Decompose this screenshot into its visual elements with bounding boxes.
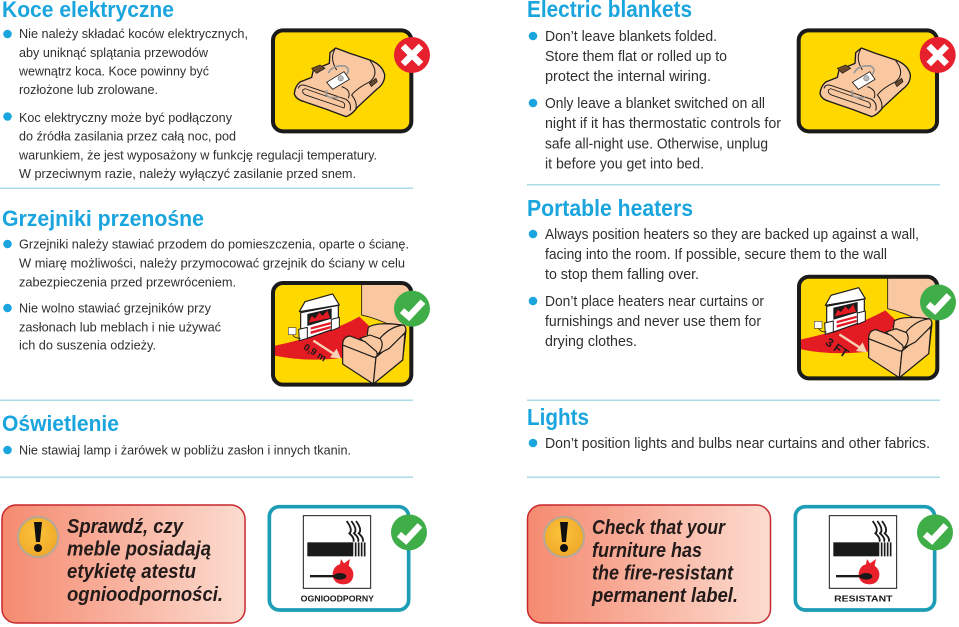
text block: blanket bullets: it before you get into bed.	[545, 156, 704, 172]
text block: lights bullet: Don’t position lights and bulbs near curtains and other fabrics.	[545, 435, 930, 452]
icon: heater and armchair, tick (PL): 0,9 m	[301, 342, 328, 364]
label card: fire-resistant sign (PL)	[269, 507, 427, 610]
text block: grzejniki bullets: Grzejniki należy stawiać przodem do pomieszczenia, oparte o ścianę.	[19, 236, 409, 252]
label card: fire-resistant sign (PL): OGNIOODPORNY	[301, 594, 374, 604]
icon: heater and armchair, tick (PL)	[273, 283, 430, 385]
text block: grzejniki bullets: zasłonach lub meblach i nie używać	[19, 320, 221, 334]
text block: grzejniki bullets: Nie wolno stawiać grzejników przy	[19, 300, 211, 316]
label card: fire-resistant sign (EN): RESISTANT	[834, 594, 893, 604]
divider	[527, 400, 940, 401]
callout: check furniture (EN)	[528, 505, 770, 623]
heading: Oświetlenie: Oświetlenie	[2, 411, 119, 436]
label card: fire-resistant sign (EN)	[795, 507, 953, 610]
callout: check furniture (EN): the fire-resistant	[592, 562, 734, 584]
icon: heater and armchair, tick (EN)	[799, 277, 956, 378]
text block: heater bullets	[529, 226, 919, 350]
text block: grzejniki bullets	[3, 236, 409, 352]
text block: blanket bullets: safe all-night use. Otherwise, unplug	[545, 136, 768, 152]
callout: check furniture (EN): permanent label.	[591, 585, 738, 607]
text block: koce bullets: rozłożone lub zrolowane.	[19, 82, 158, 97]
text block: blanket bullets: night if it has thermostatic controls for	[545, 115, 781, 132]
text block: blanket bullets: Only leave a blanket switched on all	[545, 95, 765, 112]
heading: Grzejniki przenośne: Grzejniki przenośne	[2, 206, 204, 231]
callout: check furniture (PL): Sprawdź, czy	[67, 516, 184, 538]
callout: check furniture (PL)	[2, 505, 245, 623]
text block: heater bullets: Don’t place heaters near curtains or	[545, 293, 764, 310]
text block: blanket bullets: Store them flat or rolled up to	[545, 48, 727, 65]
text block: koce bullets: do źródła zasilania przez całą noc, pod	[19, 128, 236, 144]
text block: koce bullets	[3, 26, 377, 181]
text block: koce bullets: Koc elektryczny może być podłączony	[19, 110, 232, 125]
text block: heater bullets: to stop them falling over.	[545, 266, 699, 283]
divider	[527, 476, 940, 478]
divider	[0, 476, 413, 478]
callout: check furniture (EN): furniture has	[592, 540, 702, 562]
text block: grzejniki bullets: ich do suszenia odzieży.	[19, 338, 156, 352]
text block: heater bullets: Always position heaters so they are backed up against a wall,	[545, 226, 919, 243]
text block: oświetlenie bullet: Nie stawiaj lamp i żarówek w pobliżu zasłon i innych tkanin.	[19, 442, 351, 458]
divider	[527, 184, 940, 186]
text block: heater bullets: furnishings and never use them for	[545, 313, 761, 330]
icon: folded blanket, crossed (EN)	[799, 30, 956, 131]
text block: grzejniki bullets: zabezpieczenia przed przewróceniem.	[19, 274, 236, 290]
callout: check furniture (PL): ognioodporności.	[67, 584, 223, 606]
callout: check furniture (PL): meble posiadają	[67, 538, 211, 560]
icon: warning	[544, 517, 584, 557]
text block: heater bullets: drying clothes.	[545, 333, 637, 350]
icon: warning	[18, 517, 58, 557]
divider	[0, 188, 413, 189]
text block: koce bullets: warunkiem, że jest wyposażony w funkcję regulacji temperatury.	[18, 148, 377, 162]
text block: grzejniki bullets: W miarę możliwości, należy przymocować grzejnik do ściany w celu	[19, 256, 405, 270]
text block: heater bullets: facing into the room. If possible, secure them to the wall	[545, 246, 887, 263]
heading: Portable heaters: Portable heaters	[527, 195, 693, 221]
icon: folded blanket, crossed (PL)	[273, 30, 430, 131]
heading: Lights: Lights	[527, 404, 589, 430]
text block: koce bullets: W przeciwnym razie, należy wyłączyć zasilanie przed snem.	[19, 166, 356, 181]
callout: check furniture (PL): etykietę atestu	[67, 561, 196, 583]
text block: koce bullets: aby uniknąć splątania przewodów	[19, 45, 209, 60]
text block: blanket bullets: Don’t leave blankets folded.	[545, 28, 717, 45]
text block: blanket bullets	[529, 28, 781, 172]
text block: koce bullets: wewnątrz koca. Koce powinny być	[18, 64, 209, 78]
divider	[0, 400, 413, 401]
text block: koce bullets: Nie należy składać koców elektrycznych,	[19, 26, 248, 41]
text block: blanket bullets: protect the internal wiring.	[545, 68, 711, 85]
icon: heater and armchair, tick (EN): 3 FT	[823, 335, 852, 361]
callout: check furniture (EN): Check that your	[592, 517, 726, 539]
